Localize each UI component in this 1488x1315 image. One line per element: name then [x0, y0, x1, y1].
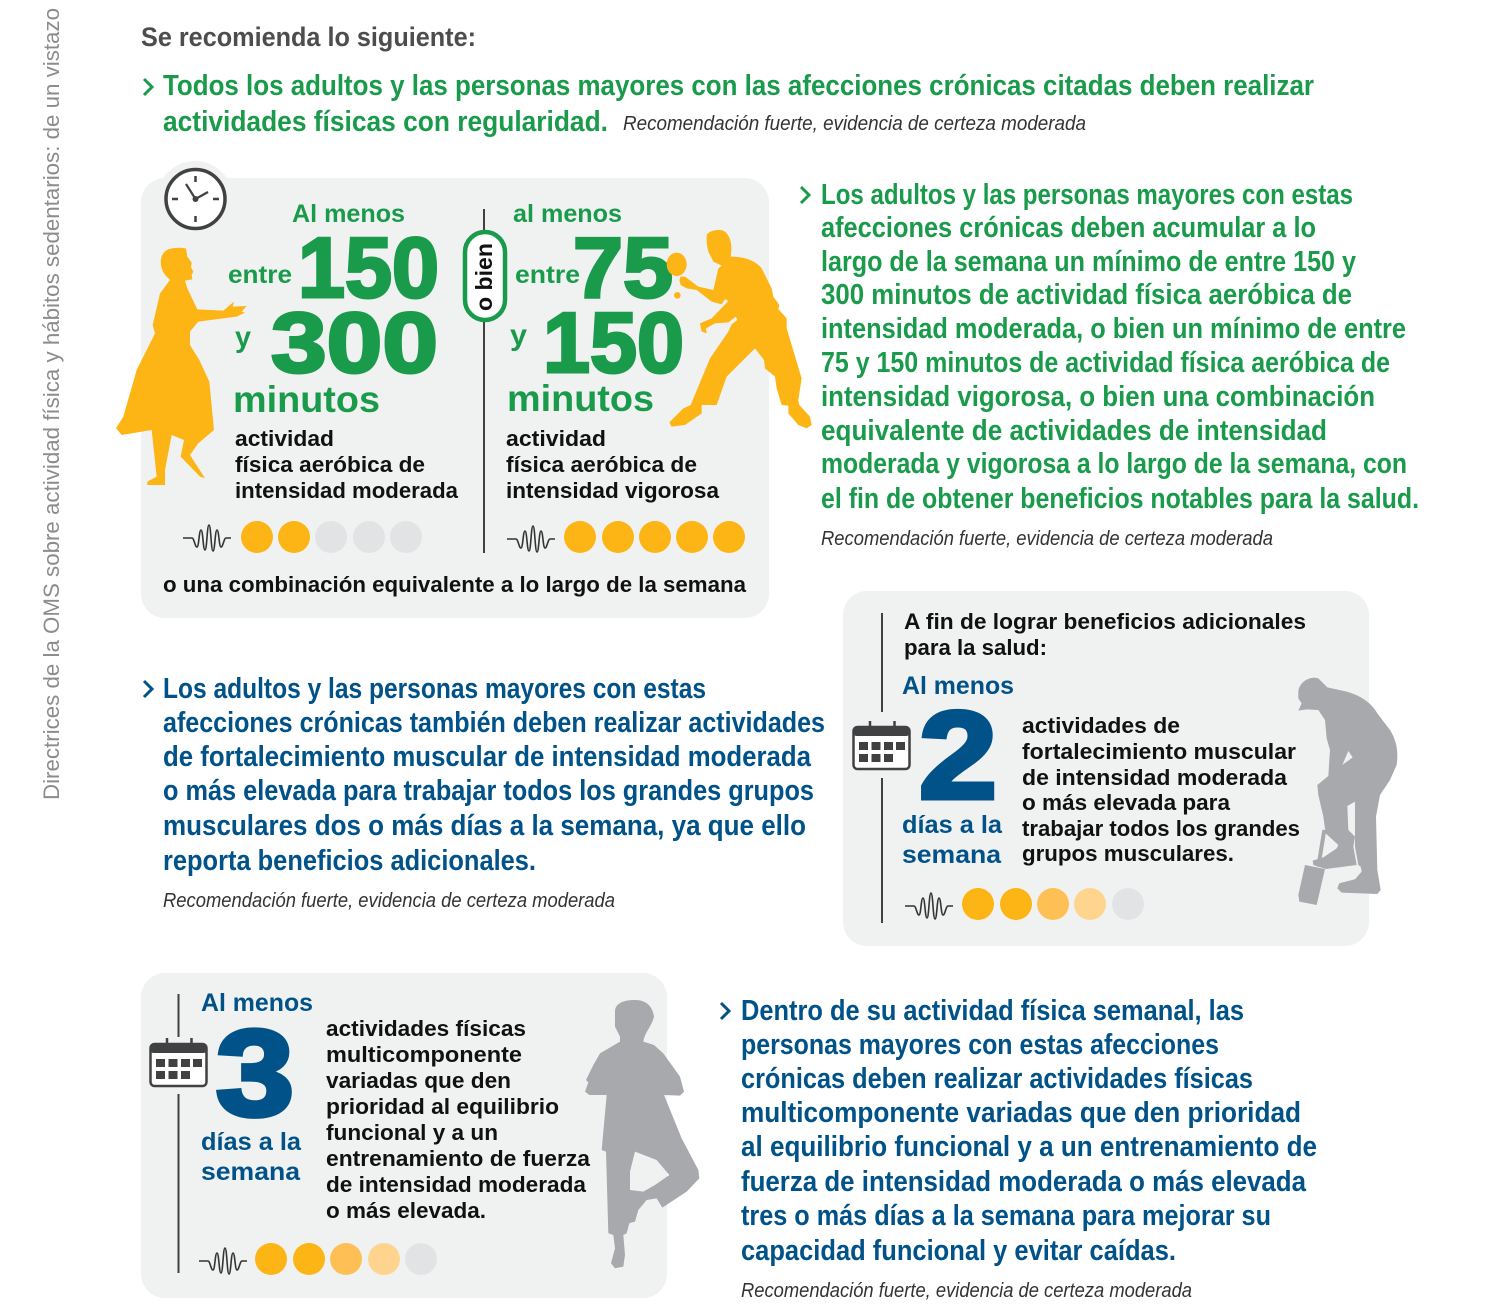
moderate intensity column: entre [228, 261, 292, 289]
recommendation 2: weekly aerobic activity: 300 minutos de actividad física aeróbica de [821, 279, 1352, 311]
panel: multicomponent activity [141, 973, 699, 1298]
recommendation 3: muscle strengthening [144, 673, 825, 912]
"o bien" pill: o bien [471, 243, 497, 311]
stat: 3 days per week [201, 989, 313, 1186]
moderate intensity column: Al menos [292, 200, 405, 228]
panel lead-in text: para la salud: [904, 635, 1047, 660]
moderate intensity column: física aeróbica de [235, 452, 425, 477]
muscle activity description: grupos musculares. [1022, 841, 1234, 866]
recommendation 2: weekly aerobic activity: 75 y 150 minutos de actividad física aeróbica de [821, 347, 1390, 379]
certainty rating: muscle strengthening [905, 888, 1144, 920]
vigorous intensity column: y [510, 319, 527, 352]
stat: 2 days per week: Al menos [902, 672, 1014, 700]
panel background [141, 161, 769, 618]
recommendation 3: muscle strengthening: de fortalecimiento muscular de intensidad moderada [163, 741, 812, 773]
recommendation 3: muscle strengthening: o más elevada para trabajar todos los grandes grupos [163, 775, 814, 807]
recommendation 4: older adults [721, 995, 1317, 1302]
recommendation 3: muscle strengthening: reporta beneficios adicionales. [163, 845, 536, 877]
moderate intensity column: 150 [298, 221, 439, 316]
vigorous intensity column: actividad [506, 426, 606, 451]
panel background [141, 973, 667, 1298]
multicomponent activity description: entrenamiento de fuerza [326, 1146, 591, 1171]
moderate intensity column: actividad [235, 426, 334, 451]
recommendation 2: weekly aerobic activity: afecciones crónicas deben acumular a lo [821, 212, 1316, 244]
recommendation 1: regular physical activity: Recomendación fuerte, evidencia de certeza moderada [623, 112, 1086, 135]
certainty rating: moderate intensity [183, 521, 422, 553]
stat: 3 days per week: 3 [216, 1005, 294, 1141]
recommendation 3: muscle strengthening: afecciones crónicas también deben realizar actividades [163, 707, 825, 739]
heading: Se recomienda lo siguiente: [141, 22, 476, 52]
recommendation 3: muscle strengthening: musculares dos o más días a la semana, ya que ello [163, 810, 806, 842]
recommendation 2: weekly aerobic activity: intensidad vigorosa, o bien una combinación [821, 381, 1375, 413]
recommendation 3: muscle strengthening: Los adultos y las personas mayores con estas [163, 673, 706, 705]
panel lead-in text: A fin de lograr beneficios adicionales [904, 609, 1306, 634]
vigorous intensity column: 75 [573, 221, 673, 316]
panel lead-in text [904, 609, 1306, 660]
stat: 3 days per week: días a la [201, 1128, 302, 1156]
recommendation 4: older adults: al equilibrio funcional y a un entrenamiento de [741, 1131, 1317, 1163]
recommendation 2: weekly aerobic activity: Recomendación fuerte, evidencia de certeza moderada [821, 527, 1273, 550]
stat: 2 days per week: 2 [919, 687, 997, 825]
multicomponent activity description: funcional y a un [326, 1120, 498, 1145]
vigorous intensity column: 150 [543, 296, 684, 391]
silhouette: man digging with shovel [1298, 678, 1397, 905]
multicomponent activity description: o más elevada. [326, 1198, 486, 1223]
vigorous intensity column: intensidad vigorosa [506, 478, 720, 503]
combination note: o una combinación equivalente a lo largo de la semana [163, 572, 747, 597]
recommendation 4: older adults: Dentro de su actividad física semanal, las [741, 995, 1244, 1027]
sidebar running title: Directrices de la OMS sobre actividad física y hábitos sedentarios: de un vistazo [39, 8, 64, 800]
muscle activity description: fortalecimiento muscular [1022, 739, 1296, 764]
recommendation 4: older adults: crónicas deben realizar actividades físicas [741, 1063, 1253, 1095]
recommendation 1: regular physical activity: Todos los adultos y las personas mayores con las afecciones crónicas citadas deben realizar [163, 70, 1314, 102]
multicomponent activity description: de intensidad moderada [326, 1172, 587, 1197]
moderate intensity column: intensidad moderada [235, 478, 459, 503]
vigorous intensity column: física aeróbica de [506, 452, 697, 477]
moderate intensity column: 300 [271, 296, 438, 391]
panel background [843, 591, 1369, 946]
moderate intensity column: y [235, 321, 251, 354]
recommendation 4: older adults: Recomendación fuerte, evidencia de certeza moderada [741, 1279, 1192, 1302]
multicomponent activity description: variadas que den [326, 1068, 511, 1093]
recommendation 2: weekly aerobic activity [801, 179, 1419, 550]
multicomponent activity description: prioridad al equilibrio [326, 1094, 559, 1119]
stat: 2 days per week [902, 672, 1014, 869]
vigorous intensity column [506, 200, 720, 503]
"o bien" pill [465, 232, 505, 320]
moderate intensity column [228, 200, 459, 503]
multicomponent activity description: multicomponente [326, 1042, 522, 1067]
stat: 2 days per week: semana [902, 841, 1002, 869]
recommendation 4: older adults: capacidad funcional y evitar caídas. [741, 1235, 1176, 1267]
icon: clock [166, 170, 225, 228]
muscle activity description: o más elevada para [1022, 790, 1231, 815]
silhouette: table tennis player [667, 230, 812, 428]
vigorous intensity column: al menos [513, 200, 622, 228]
icon: calendar [854, 721, 910, 769]
muscle activity description: de intensidad moderada [1022, 765, 1288, 790]
recommendation 1: regular physical activity [144, 70, 1314, 138]
certainty rating: vigorous intensity [507, 521, 745, 553]
multicomponent activity description [326, 1016, 591, 1223]
stat: 3 days per week: semana [201, 1158, 301, 1186]
recommendation 3: muscle strengthening: Recomendación fuerte, evidencia de certeza moderada [163, 889, 615, 912]
recommendation 2: weekly aerobic activity: intensidad moderada, o bien un mínimo de entre [821, 313, 1406, 345]
muscle activity description: trabajar todos los grandes [1022, 816, 1300, 841]
stat: 3 days per week: Al menos [201, 989, 313, 1017]
vigorous intensity column: minutos [507, 378, 654, 419]
recommendation 4: older adults: tres o más días a la semana para mejorar su [741, 1200, 1271, 1232]
panel: muscle strengthening [843, 591, 1397, 946]
certainty rating: multicomponent activity [199, 1243, 437, 1275]
recommendation 2: weekly aerobic activity: equivalente de actividades de intensidad [821, 415, 1327, 447]
recommendation 2: weekly aerobic activity: moderada y vigorosa a lo largo de la semana, con [821, 448, 1407, 480]
muscle activity description: actividades de [1022, 713, 1180, 738]
recommendation 4: older adults: fuerza de intensidad moderada o más elevada [741, 1166, 1307, 1198]
recommendation 4: older adults: multicomponente variadas que den prioridad [741, 1097, 1301, 1129]
multicomponent activity description: actividades físicas [326, 1016, 526, 1041]
panel: aerobic minutes [116, 161, 812, 618]
stat: 2 days per week: días a la [902, 811, 1003, 839]
icon: calendar [150, 1038, 206, 1086]
recommendation 2: weekly aerobic activity: largo de la semana un mínimo de entre 150 y [821, 246, 1356, 278]
recommendation 1: regular physical activity: actividades físicas con regularidad. [163, 106, 608, 138]
muscle activity description [1022, 713, 1300, 866]
silhouette: woman dancing [116, 248, 247, 485]
moderate intensity column: minutos [233, 379, 380, 420]
recommendation 4: older adults: personas mayores con estas afecciones [741, 1029, 1219, 1061]
silhouette: older woman balancing on one leg [585, 1000, 699, 1268]
vigorous intensity column: entre [515, 261, 580, 289]
recommendation 2: weekly aerobic activity: Los adultos y las personas mayores con estas [821, 179, 1353, 211]
